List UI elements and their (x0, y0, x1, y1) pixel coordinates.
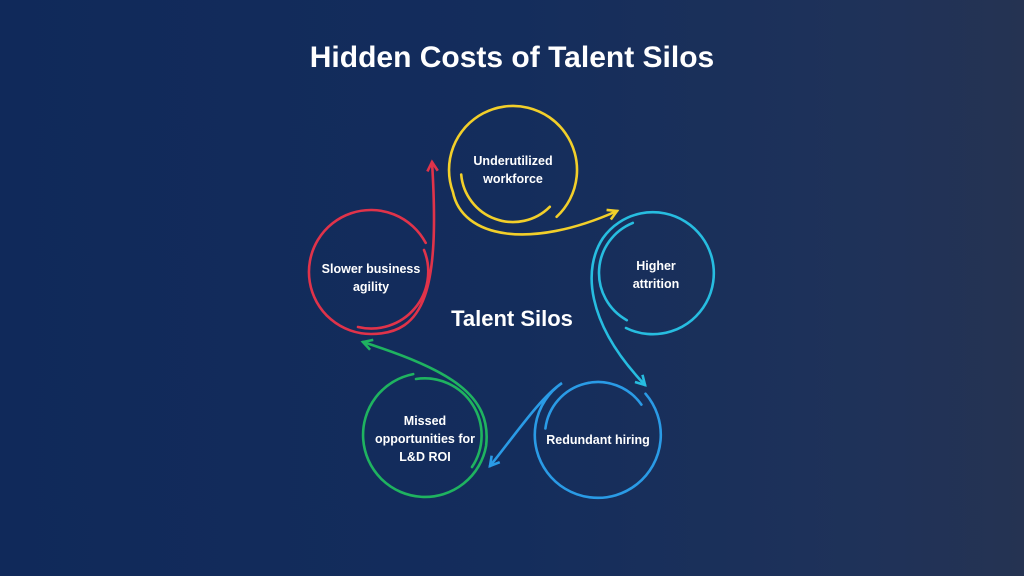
node: underutilized workforce (449, 106, 617, 234)
node: missed opportunities (363, 342, 487, 497)
node: redundant hiring: Redundant hiring (546, 433, 650, 447)
node: missed opportunities: opportunities for (375, 432, 475, 446)
node: higher attrition (592, 212, 714, 385)
node: higher attrition: Higher (636, 259, 676, 273)
title: Hidden Costs of Talent Silos (310, 41, 714, 74)
node: slower business agility (309, 162, 434, 334)
node: slower business agility: Slower business (322, 262, 420, 276)
node: missed opportunities: Missed (404, 414, 446, 428)
center label: Talent Silos (451, 306, 573, 331)
node: slower business agility: agility (353, 280, 389, 294)
node: higher attrition: attrition (633, 277, 679, 291)
node: missed opportunities: L&D ROI (399, 450, 451, 464)
node: underutilized workforce: workforce (482, 172, 543, 186)
node: underutilized workforce: Underutilized (473, 154, 553, 168)
node: redundant hiring (490, 382, 661, 498)
